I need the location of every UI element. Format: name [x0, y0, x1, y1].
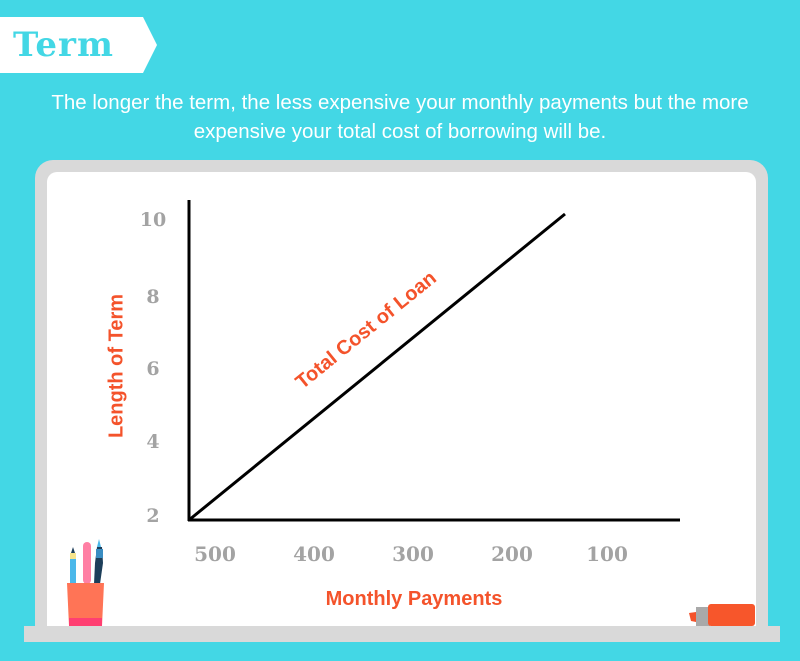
x axis ticks: 100 — [586, 542, 628, 566]
board tray — [24, 626, 780, 642]
x axis label: Monthly Payments — [326, 588, 502, 610]
subtitle text: The longer the term, the less expensive your monthly payments but the more expensive your total cost of borrowing will be. — [51, 91, 749, 143]
y axis ticks: 8 — [146, 286, 160, 308]
x axis ticks: 300 — [392, 542, 434, 566]
x axis ticks: 500 — [194, 542, 236, 566]
x axis ticks — [194, 542, 628, 566]
title banner — [0, 17, 157, 73]
whiteboard — [35, 160, 768, 640]
y axis ticks: 2 — [146, 505, 160, 527]
title text: Term — [13, 25, 114, 65]
y axis ticks: 10 — [140, 209, 166, 231]
y axis ticks: 4 — [146, 431, 160, 453]
line label: Total Cost of Loan — [292, 267, 441, 394]
icon: pen cup — [67, 539, 104, 626]
icon: marker — [689, 604, 755, 626]
y axis label: Length of Term — [105, 294, 127, 438]
y axis ticks — [140, 209, 166, 527]
y axis ticks: 6 — [146, 358, 160, 380]
x axis ticks: 400 — [293, 542, 335, 566]
x axis ticks: 200 — [491, 542, 533, 566]
